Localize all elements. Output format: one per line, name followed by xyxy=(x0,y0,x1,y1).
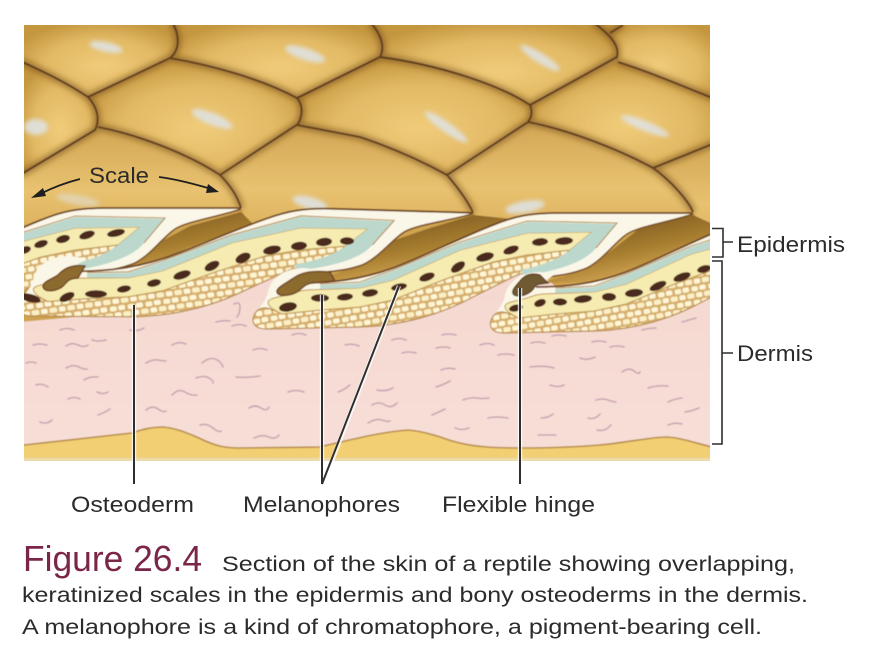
label: Epidermis: Epidermis xyxy=(737,232,845,257)
arrows from Scale label xyxy=(31,177,219,198)
bottom edge of yellow layer xyxy=(24,458,710,461)
yellow subcutaneous layer xyxy=(24,426,710,461)
scale cross-section, unit 1 xyxy=(24,207,474,318)
bracket: Dermis xyxy=(712,261,733,444)
label: Melanophores: Melanophores xyxy=(243,492,400,517)
label: Flexible hinge: Flexible hinge xyxy=(442,492,595,517)
label: Dermis: Dermis xyxy=(737,341,813,366)
label: Osteoderm: Osteoderm xyxy=(71,492,194,517)
scale edge shadows xyxy=(20,22,715,213)
gaps: shadowed pockets under each scale tip xyxy=(66,212,715,283)
melanophores, unit 3 xyxy=(508,264,712,313)
scale cross-section, far-left unit xyxy=(24,206,242,291)
melanophores, far-left unit xyxy=(18,228,126,255)
scale outlines xyxy=(20,22,715,213)
leader lines to bottom labels xyxy=(134,286,520,484)
arrow: scale left xyxy=(31,179,80,198)
flexible hinge, unit 3 xyxy=(513,274,548,296)
caption line 2: keratinized scales in the epidermis and bony osteoderms in the dermis. xyxy=(22,583,808,607)
scale cross-section, unit 2 xyxy=(253,213,693,329)
label: Scale: Scale xyxy=(89,163,149,188)
arrow: scale right xyxy=(159,177,219,193)
melanophores, unit 1 xyxy=(18,237,354,305)
base gold background xyxy=(24,56,696,322)
caption line 1: Section of the skin of a reptile showing overlapping, xyxy=(222,552,795,576)
scale highlights xyxy=(24,39,671,216)
bracket: Epidermis xyxy=(712,228,733,257)
scales: overlapping keratinized scale surfaces xyxy=(24,25,710,226)
dermis: pink connective tissue xyxy=(24,274,710,448)
melanophores, unit 2 xyxy=(278,237,573,313)
dermis fibres xyxy=(26,303,699,438)
flexible hinge, unit 1 xyxy=(43,265,85,291)
illustration: skin cross-section artwork xyxy=(24,25,710,461)
caption line 3: A melanophore is a kind of chromatophore, a pigment-bearing cell. xyxy=(22,615,762,639)
caption heading: Figure 26.4: Figure 26.4 xyxy=(23,538,202,579)
scale cross-section, unit 3 xyxy=(489,233,710,334)
flexible hinge, unit 2 xyxy=(277,271,335,295)
